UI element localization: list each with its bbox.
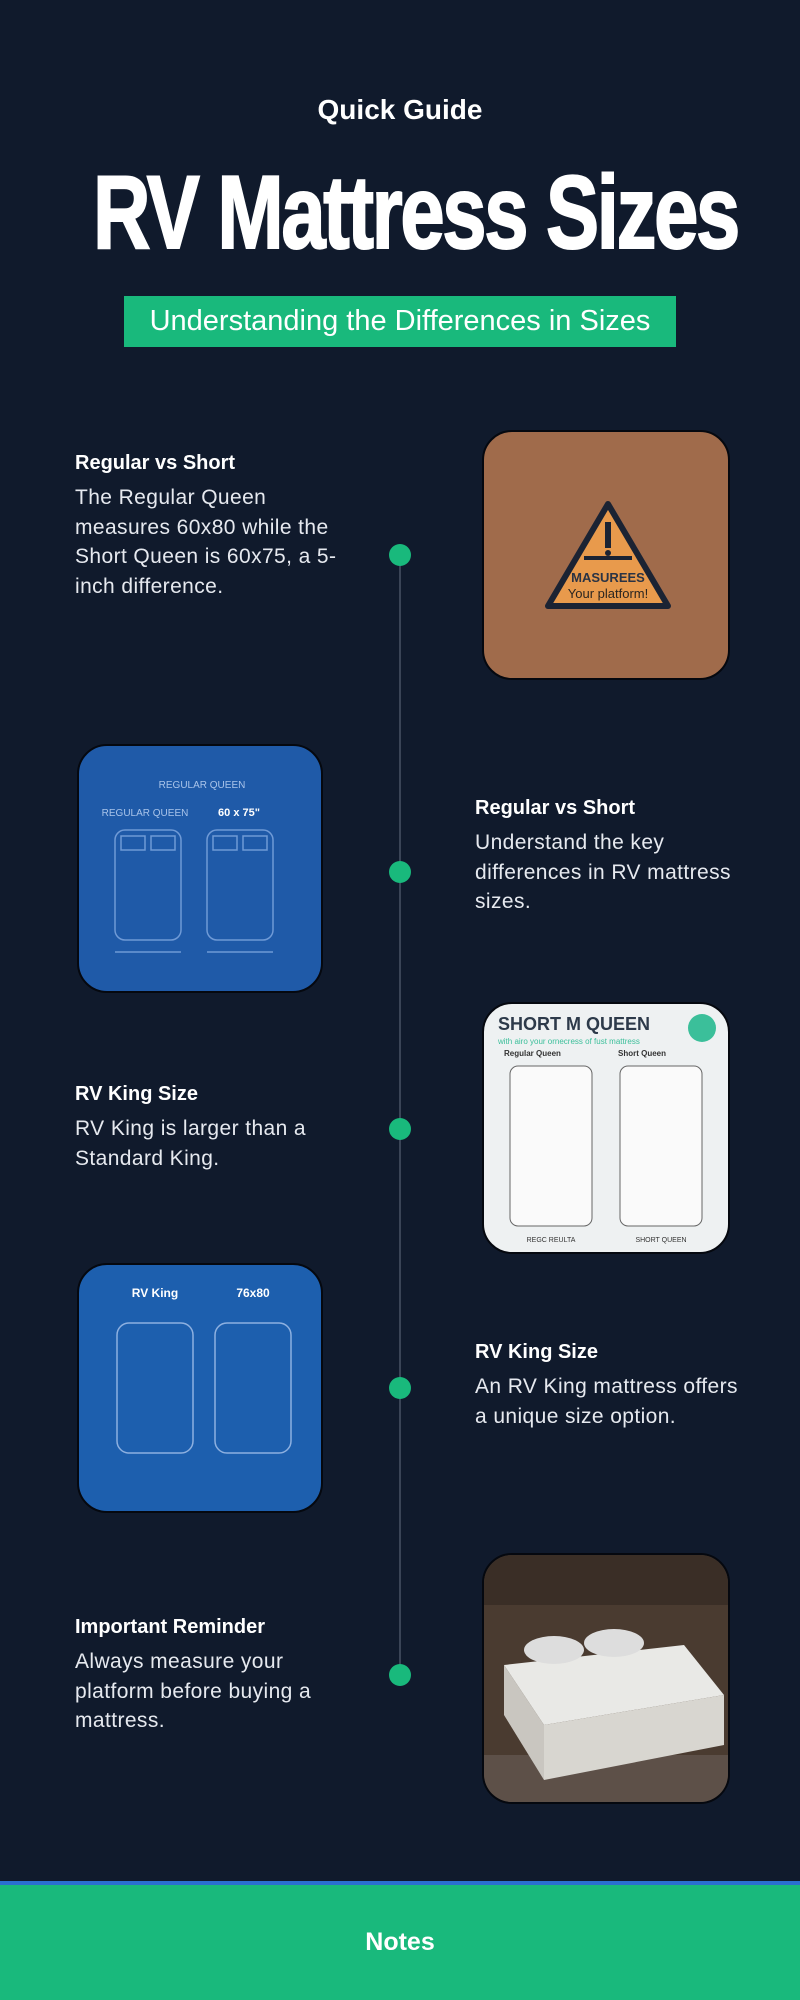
- image 4: blueprint RV King: RV King: [132, 1286, 178, 1300]
- text block 5: Always measure your platform before buying a mattress.: [75, 1650, 311, 1732]
- text block 1: Regular vs Short: [75, 452, 235, 474]
- subtitle: Quick Guide: Quick Guide: [318, 94, 482, 125]
- image 2: blueprint regular queen: REGULAR QUEEN: [102, 808, 188, 819]
- image 1: warning sign: [482, 430, 730, 680]
- dot 5: [389, 1664, 411, 1686]
- image 1: warning sign: MASUREES: [571, 570, 645, 585]
- banner: Understanding the Differences in Sizes: [150, 305, 650, 337]
- dot 2: [389, 861, 411, 883]
- text block 4: [475, 1341, 738, 1428]
- image 2: blueprint regular queen: REGULAR QUEEN: [159, 780, 245, 791]
- dot 1: [389, 544, 411, 566]
- text block 3: RV King is larger than a Standard King.: [75, 1117, 306, 1170]
- image 3: short queen chart: SHORT QUEEN: [635, 1237, 687, 1244]
- text block 4: An RV King mattress offers a unique size option.: [475, 1375, 738, 1428]
- footer: Notes: Notes: [365, 1928, 435, 1956]
- image 3: short queen chart: REGC REULTA: [527, 1237, 576, 1244]
- title: RV Mattress Sizes: [93, 155, 738, 271]
- banner: [124, 296, 676, 347]
- footer line: [0, 1881, 800, 1885]
- image 4: blueprint RV King: 76x80: [236, 1286, 270, 1300]
- image 1: warning sign: Your platform!: [568, 586, 648, 601]
- image 3: short queen chart: Short Queen: [618, 1049, 666, 1058]
- text block 1: The Regular Queen measures 60x80 while the Short Queen is 60x75, a 5-inch difference.: [75, 486, 336, 598]
- image 3: short queen chart: SHORT M QUEEN: [498, 1014, 650, 1034]
- text block 3: RV King Size: [75, 1083, 198, 1105]
- text block 2: Understand the key differences in RV mattress sizes.: [475, 831, 731, 913]
- image 4: blueprint RV King: [77, 1263, 323, 1513]
- footer: Notes: [0, 1885, 800, 2000]
- dot 3: [389, 1118, 411, 1140]
- image 5: RV bedroom photo: [482, 1553, 730, 1804]
- text block 4: RV King Size: [475, 1341, 598, 1363]
- text block 3: [75, 1083, 306, 1170]
- dot 4: [389, 1377, 411, 1399]
- text block 5: Important Reminder: [75, 1616, 265, 1638]
- image 3: short queen chart: Regular Queen: [504, 1049, 561, 1058]
- image 2: blueprint regular queen: 60 x 75": [218, 807, 260, 819]
- timeline line: [399, 549, 401, 1675]
- text block 2: Regular vs Short: [475, 797, 635, 819]
- image 3: short queen chart: [482, 1002, 730, 1254]
- image 3: short queen chart: with airo your ornecress of fust mattress: [497, 1037, 640, 1046]
- image 2: blueprint regular queen: [77, 744, 323, 993]
